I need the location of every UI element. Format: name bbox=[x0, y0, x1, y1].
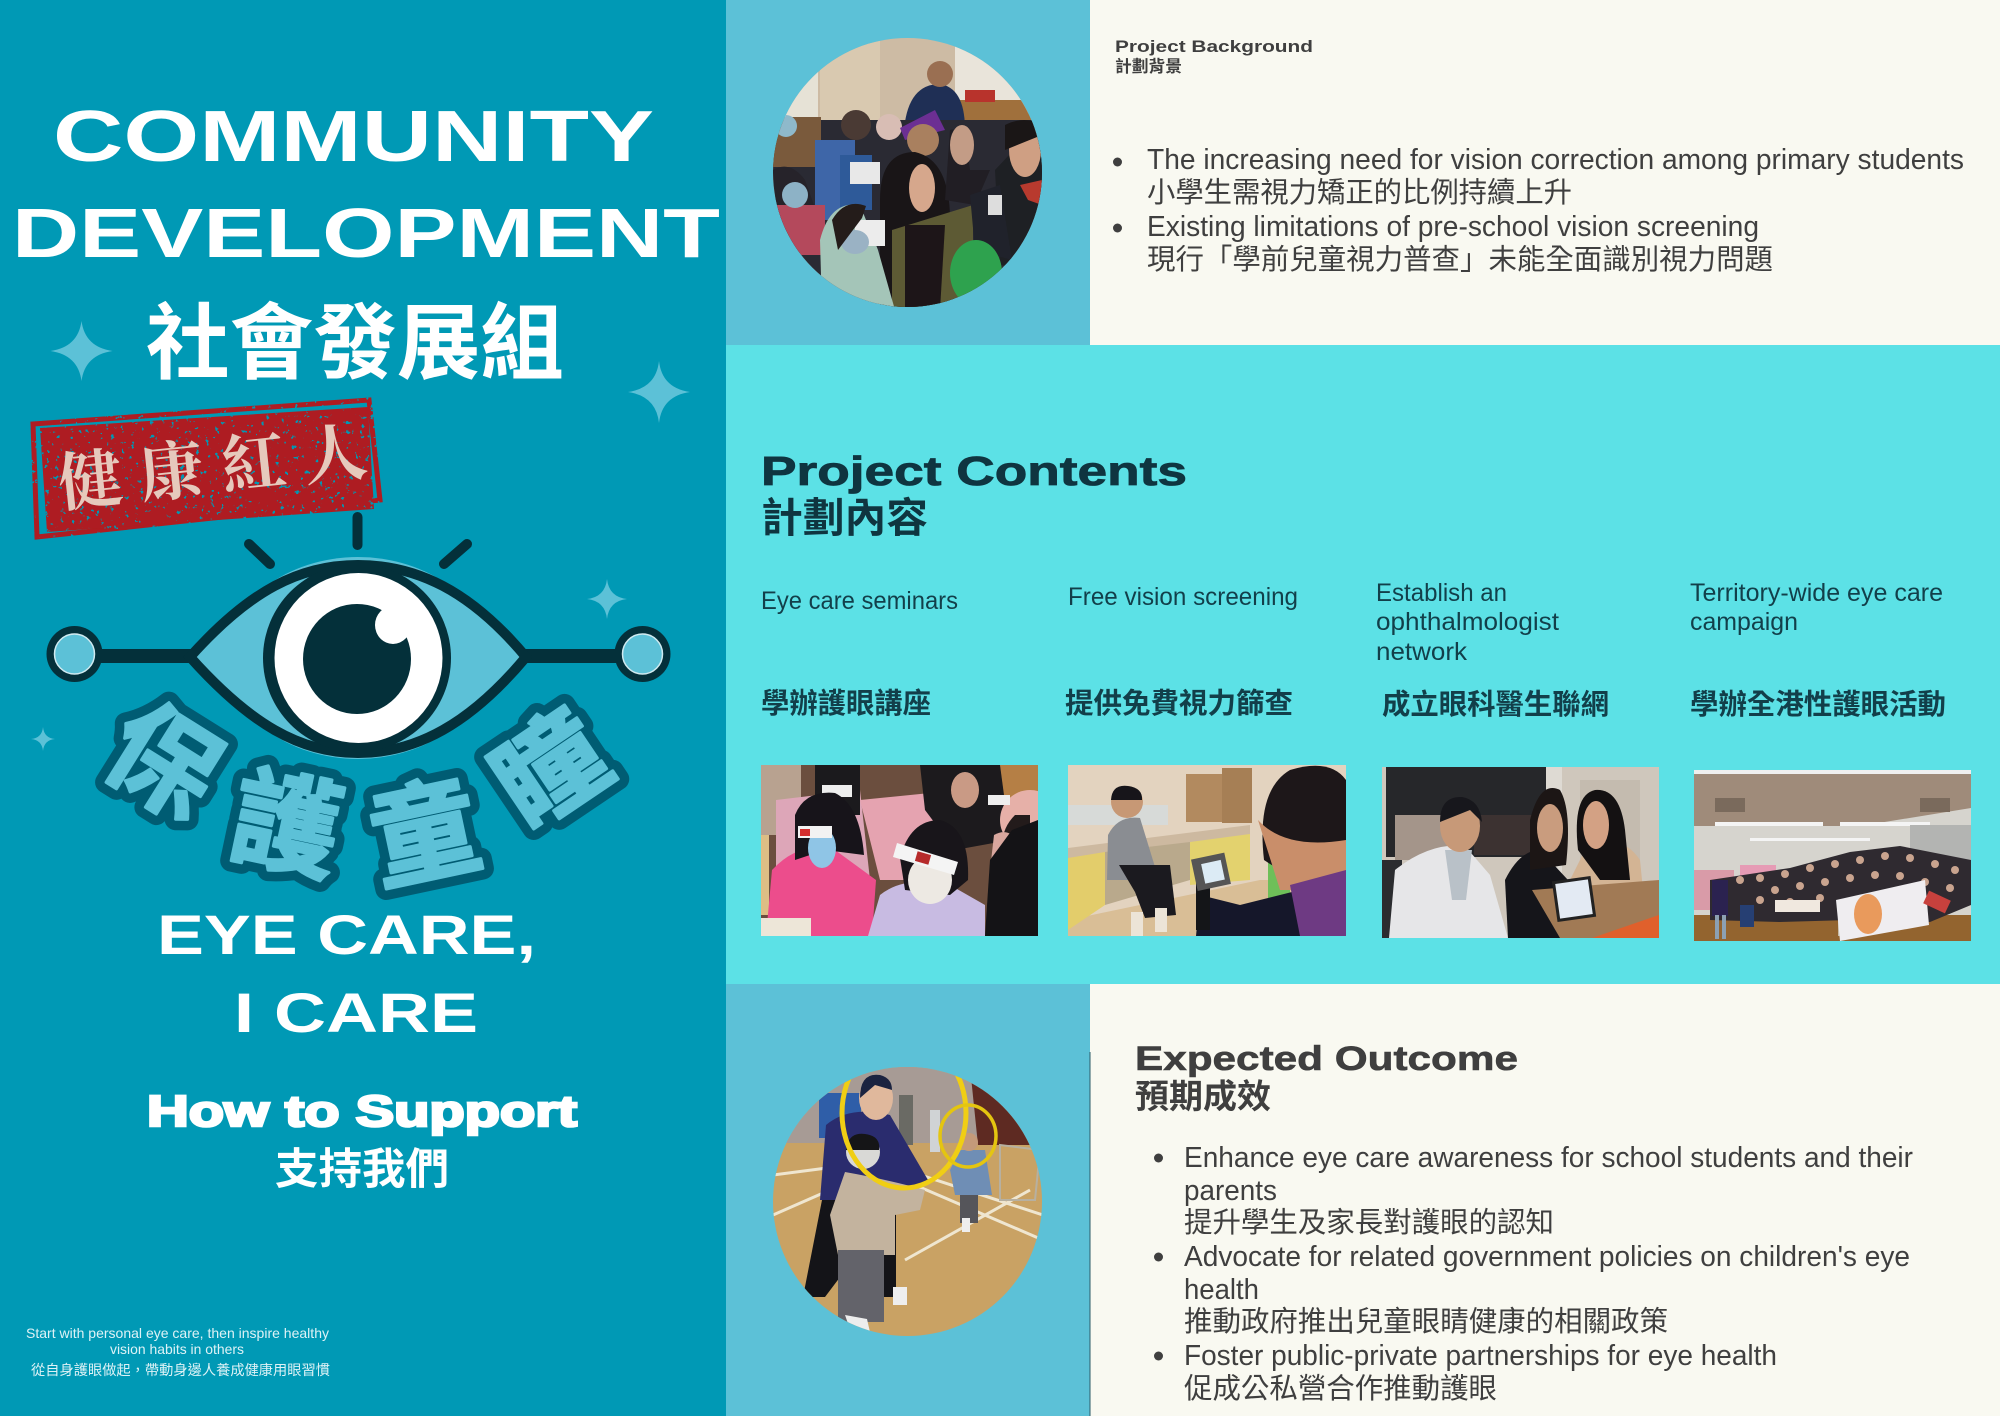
photo: children wearing 3D glasses bbox=[761, 765, 1038, 936]
heading: protect children's eyes lettering: 童 bbox=[360, 764, 491, 905]
column: free vision screening bbox=[1065, 583, 1298, 719]
heading: how to support: How to Support bbox=[147, 1087, 577, 1136]
heading: protect children's eyes lettering: 護 bbox=[220, 755, 351, 896]
stamp: health ambassadors bbox=[33, 400, 380, 537]
heading: protect children's eyes lettering: 保 bbox=[85, 682, 241, 842]
text block: call to action: 從自身護眼做起，帶動身邊人養成健康用眼習慣 bbox=[31, 1362, 330, 1378]
icon: sparkle right bbox=[628, 361, 690, 423]
heading: protect children's eyes lettering: 保 bbox=[85, 682, 241, 842]
column: eye care seminars bbox=[761, 587, 958, 719]
heading: project contents bbox=[761, 448, 1187, 541]
photo: campaign group picture bbox=[1694, 770, 1971, 941]
heading: eye care, i care bbox=[157, 903, 536, 1044]
column: ophthalmologist network: Establish an bbox=[1376, 579, 1507, 607]
heading: project contents: 計劃內容 bbox=[761, 495, 928, 541]
heading: protect children's eyes lettering: 瞳 bbox=[473, 690, 630, 851]
heading: eye care, i care: EYE CARE, bbox=[157, 903, 536, 966]
heading: project contents: Project Contents bbox=[761, 448, 1187, 494]
photo: parents and children with VR headsets bbox=[773, 38, 1045, 310]
photo: doctor with project team bbox=[1382, 767, 1659, 938]
text block: background bullets: The increasing need for vision correction among primary students bbox=[1147, 144, 1964, 176]
heading: expected outcome: 預期成效 bbox=[1135, 1079, 1271, 1116]
column: ophthalmologist network: ophthalmologist bbox=[1376, 608, 1559, 636]
column: ophthalmologist network: network bbox=[1376, 638, 1468, 666]
heading: how to support: 支持我們 bbox=[275, 1146, 449, 1194]
text block: outcome bullets bbox=[1154, 1142, 1913, 1405]
icon: sparkle left bbox=[50, 321, 112, 381]
text block: outcome bullets: 推動政府推出兒童眼睛健康的相關政策 bbox=[1184, 1306, 1668, 1338]
heading: protect children's eyes lettering bbox=[85, 682, 630, 905]
heading: protect children's eyes lettering: 護 bbox=[220, 755, 351, 896]
title: community development: DEVELOPMENT bbox=[12, 194, 720, 272]
column: territory-wide campaign: campaign bbox=[1690, 608, 1798, 636]
text block: background bullets: 小學生需視力矯正的比例持續上升 bbox=[1147, 177, 1572, 209]
panel: project contents bbox=[726, 345, 2000, 984]
heading: expected outcome: Expected Outcome bbox=[1135, 1040, 1518, 1078]
column: ophthalmologist network bbox=[1376, 579, 1609, 720]
text: background heading bbox=[1115, 37, 1313, 76]
icon: sparkle near eye bbox=[587, 579, 627, 619]
heading: eye care, i care: I CARE bbox=[234, 981, 478, 1044]
heading: protect children's eyes lettering: 瞳 bbox=[473, 690, 630, 851]
heading: protect children's eyes lettering: 童 bbox=[360, 764, 491, 905]
panel: left campaign column bbox=[18, 110, 719, 1376]
panel: project background bbox=[726, 0, 2000, 346]
photo: vision screening of a boy bbox=[1068, 765, 1346, 936]
text block: outcome bullets: 促成公私營合作推動護眼 bbox=[1184, 1373, 1497, 1405]
text block: background bullets: Existing limitations of pre-school vision screening bbox=[1147, 211, 1759, 243]
column: ophthalmologist network: 成立眼科醫生聯網 bbox=[1382, 688, 1609, 720]
text block: call to action: Start with personal eye care, then inspire healthy bbox=[26, 1325, 329, 1341]
text block: outcome bullets: 提升學生及家長對護眼的認知 bbox=[1184, 1207, 1554, 1239]
text block: background bullets bbox=[1113, 144, 1964, 276]
text block: outcome bullets: Advocate for related government policies on children's eye bbox=[1184, 1241, 1910, 1273]
photo: child playing with hula hoop bbox=[773, 1067, 1042, 1336]
column: territory-wide campaign: Territory-wide eye care bbox=[1690, 579, 1943, 607]
text: background heading: Project Background bbox=[1115, 37, 1313, 56]
heading: how to support bbox=[147, 1087, 577, 1194]
text block: call to action: vision habits in others bbox=[110, 1341, 244, 1357]
text block: background bullets: 現行「學前兒童視力普查」未能全面識別視力問題 bbox=[1147, 244, 1773, 276]
column: territory-wide campaign: 學辦全港性護眼活動 bbox=[1690, 688, 1946, 720]
title: community development: COMMUNITY bbox=[53, 97, 654, 177]
title: community development bbox=[12, 97, 720, 272]
column: territory-wide campaign bbox=[1690, 579, 1946, 720]
text block: outcome bullets: parents bbox=[1184, 1175, 1277, 1207]
text block: outcome bullets: health bbox=[1184, 1274, 1259, 1306]
text block: call to action bbox=[26, 1325, 330, 1378]
text: background heading: 計劃背景 bbox=[1115, 56, 1182, 76]
icon: sparkle small bbox=[31, 727, 55, 751]
column: eye care seminars: 學辦護眼講座 bbox=[761, 687, 931, 719]
stamp: health ambassadors: 健康紅人 bbox=[55, 417, 371, 520]
heading: expected outcome bbox=[1135, 1040, 1518, 1116]
icon: eye logo bbox=[46, 517, 670, 759]
title: chinese unit name: 社會發展組 bbox=[146, 297, 564, 390]
column: free vision screening: Free vision screening bbox=[1068, 583, 1298, 611]
column: eye care seminars: Eye care seminars bbox=[761, 587, 958, 615]
panel: expected outcome bbox=[726, 984, 2000, 1416]
text block: outcome bullets: Enhance eye care awareness for school students and their bbox=[1184, 1142, 1913, 1174]
text block: outcome bullets: Foster public-private partnerships for eye health bbox=[1184, 1340, 1777, 1372]
column: free vision screening: 提供免費視力篩查 bbox=[1065, 687, 1293, 719]
